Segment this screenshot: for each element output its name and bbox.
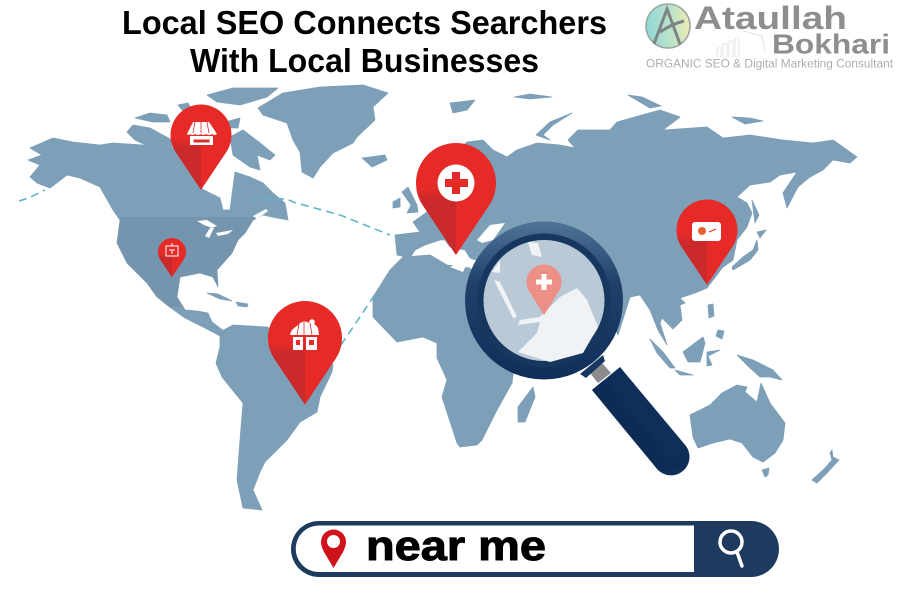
logo chart sketch [717,31,765,57]
New Zealand [812,450,839,483]
pin: small shop over USA [158,238,186,277]
search text: near me [366,522,546,569]
Caribbean [207,293,248,307]
logo emblem [646,4,690,48]
title: Local SEO Connects Searchers [122,5,607,42]
handle [590,363,690,475]
collar [580,355,605,378]
title [122,5,607,80]
New Guinea [737,355,782,380]
pin: medical over Europe [416,143,496,255]
pin: card over China [676,199,738,285]
Japan and Sakhalin [732,200,766,270]
Tasmania [762,468,769,477]
icon: market stalls [290,319,319,350]
Novaya Zemlya and northern islands [450,94,763,140]
magnified coastline [492,242,598,362]
lens ring [465,222,623,380]
Australia [690,383,785,462]
pin: market over Brazil [268,301,342,405]
logo name: Bokhari [772,28,890,60]
Southeast Asia islands [650,304,724,375]
Greenland [258,85,388,178]
Iceland [362,155,387,167]
Eurasia [395,110,857,345]
logo name [694,0,890,60]
logo name: Ataullah [694,0,847,36]
North America [28,138,288,337]
UK and Ireland [393,187,418,213]
magnified pin [526,265,562,315]
icon: location pin [321,530,346,568]
Great Lakes [197,220,233,238]
icon: medical cross [438,164,474,202]
pin: storefront over Canada [170,104,232,190]
lens glass [484,240,604,361]
icon: shop awning [187,122,217,145]
search bar [291,521,779,577]
South America [216,325,333,510]
search input field [296,526,694,572]
world map [28,85,857,510]
icon: card [692,222,721,241]
icon: small sign [166,243,178,256]
search bar frame [291,521,779,577]
Madagascar [518,387,535,422]
Arctic islands [127,88,278,170]
logo [646,0,894,70]
dashed connection lines [19,190,390,345]
Black Sea and Mediterranean cutouts [450,223,505,272]
title: With Local Businesses [190,43,539,80]
Gulf of St Lawrence [253,209,268,219]
United States shading [117,217,256,307]
icon: search [720,531,742,566]
logo tagline: ORGANIC SEO & Digital Marketing Consultant [646,58,894,70]
magnifying glass [465,222,690,475]
Africa [373,255,515,447]
